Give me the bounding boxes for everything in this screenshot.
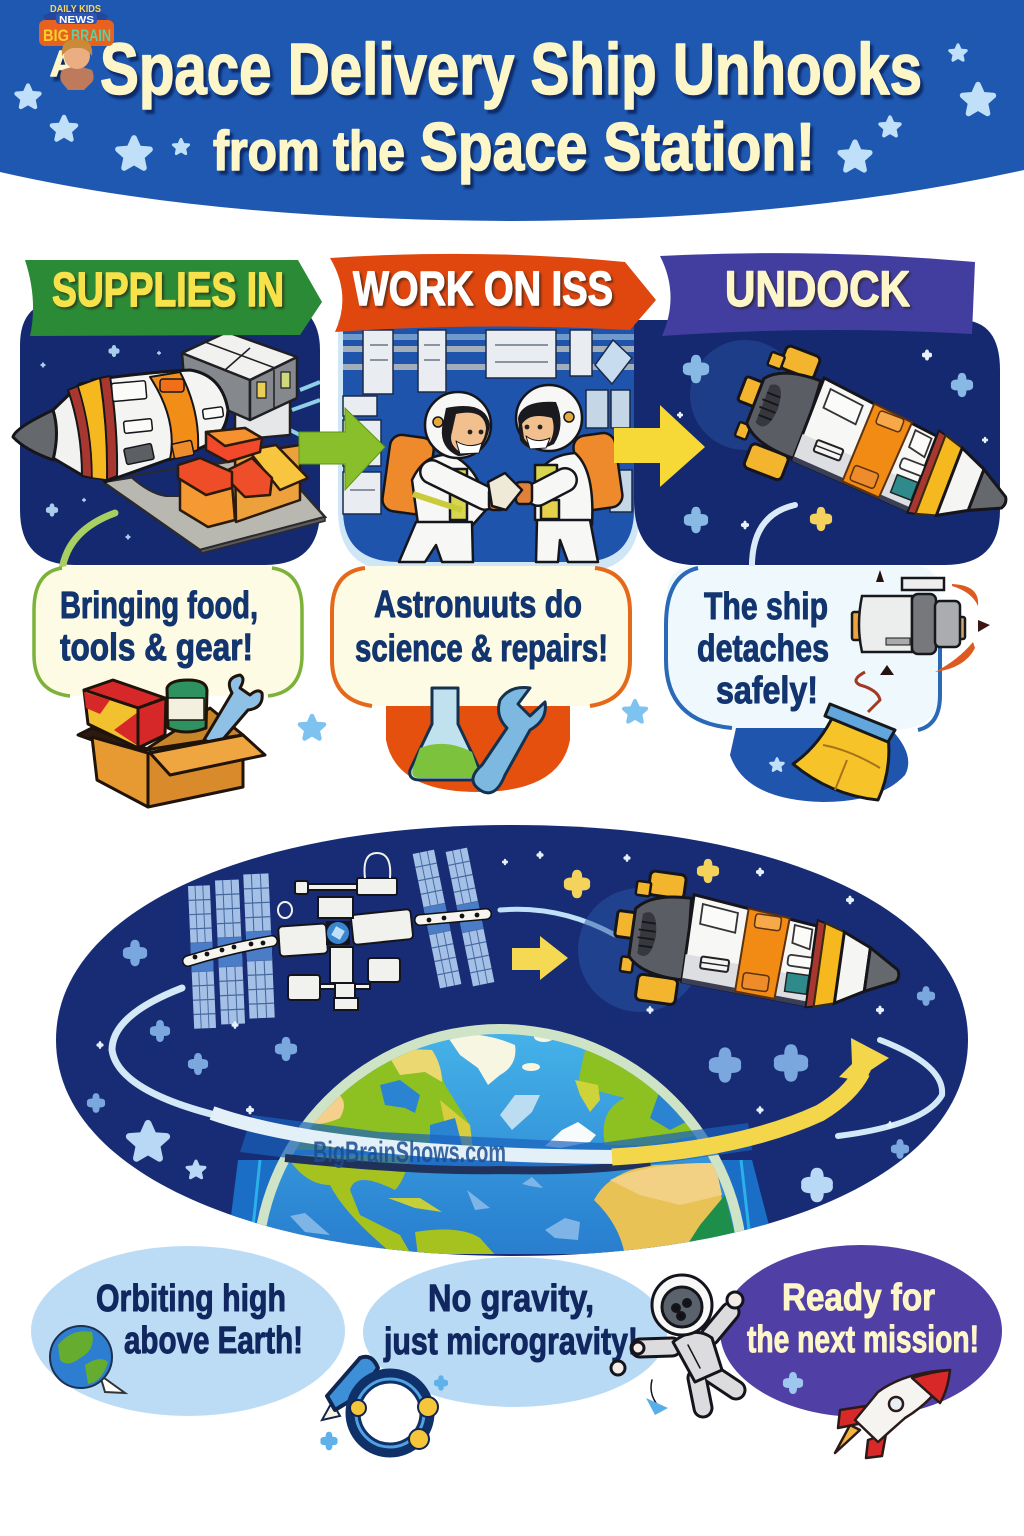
small stars [783,1372,803,1394]
callout: astronauts do science: science & repairs! [355,628,608,670]
station modules [278,878,413,1010]
grey containers [182,332,297,440]
star decorations between callouts [300,701,646,739]
oval background [56,825,968,1256]
clouds [447,1032,554,1085]
callout: bringing food: Bringing food, [60,585,258,627]
banner: supplies in: SUPPLIES IN [52,264,284,317]
bubble: orbiting high: Orbiting high [96,1278,286,1320]
callout: ship detaches: safely! [716,670,818,712]
cargo ship [13,370,228,482]
panel 3 background [634,320,1000,565]
icon: small module [852,578,965,654]
orbiting ship [606,867,909,1035]
arrow: work to undock [614,405,705,487]
callout: ship detaches: The ship [704,586,828,628]
undocking ship [716,335,1024,559]
title line 2: from the [213,119,405,182]
bubble: ready for next mission [720,1245,1002,1458]
panel: work on iss [338,320,640,572]
banner: undock [660,253,975,336]
icon: hanging bell cover [793,672,895,800]
callout: astronauts do science: Astronuuts do [374,584,582,626]
panel 1 background [20,300,320,565]
icon: blue ring module [322,1357,438,1450]
station rails [343,334,634,370]
icon: flask [410,688,480,780]
title letter A behind logo: A [50,43,76,84]
orbit arrow head [839,1038,889,1082]
title line 2: Space Station! [420,109,815,185]
icon: module motion marks [876,570,990,675]
banner: supplies in [25,260,322,336]
cargo platform [103,455,325,553]
orbit ring [112,909,942,1157]
wall papers [343,330,632,514]
panel: orbit scene [56,825,968,1256]
blue cables [291,380,320,436]
curved connector [62,513,115,570]
translucent frame band [240,1115,752,1172]
logo [39,4,114,90]
callout: bringing food [34,566,302,696]
arrow: iss to ship [512,936,568,980]
header stars [16,45,993,170]
land masses [286,1032,740,1256]
panel 3 stars [683,355,973,533]
icon: floating astronaut [611,1275,743,1415]
logo: DAILY KIDS [50,4,101,15]
watermark text: BigBrainShows.com [313,1136,506,1169]
bubble: no gravity: No gravity, [428,1278,594,1320]
bubble: orbiting high [31,1246,345,1416]
blue backdrop [730,728,908,802]
icon: supply box [78,675,265,807]
title line 2 [213,109,815,185]
small star [770,758,784,771]
astronaut left [381,392,505,562]
earth [231,1024,768,1254]
logo: BRAIN [71,26,111,45]
solar arrays left [188,885,216,1029]
truss [188,914,486,961]
banner: work on iss: WORK ON ISS [353,263,613,316]
bubble: no gravity: just microgravity! [383,1321,638,1363]
bubble: ready for next mission: Ready for [782,1277,935,1319]
central hub [326,921,350,945]
arrow: supplies to work [299,408,385,490]
callout: ship detaches: detaches [697,628,829,670]
icon: wrench [473,688,545,793]
scene stars [87,940,935,1159]
logo: BIG [43,26,69,45]
solar arrays right [413,850,461,988]
curved connector [752,505,795,572]
pale ring [256,1024,744,1254]
international space station [188,848,494,1029]
orange crates [178,428,308,527]
header banner [0,0,1024,221]
logo: NEWS [59,15,94,26]
icon: red rocket [835,1370,950,1458]
callout: ship detaches [666,566,990,802]
small stars [40,345,161,540]
callout: astronauts do science [332,566,630,793]
astronaut right [488,385,624,562]
panel 2 background [338,320,640,572]
orbit shadow [285,1158,650,1170]
bubble: no gravity [320,1257,667,1450]
outer atmosphere band [226,1160,777,1256]
icon: small earth [50,1326,125,1393]
small cross stars [320,1375,448,1450]
orange backdrop [386,695,570,792]
callout: bringing food: tools & gear! [60,627,253,669]
panel: supplies in [13,300,325,570]
bubble: orbiting high: above Earth! [124,1320,303,1362]
panel: undock [634,320,1024,572]
banner: undock: UNDOCK [725,261,910,317]
glow around ship [690,340,800,450]
glow around ship [578,888,702,1012]
banner: work on iss [330,254,656,332]
